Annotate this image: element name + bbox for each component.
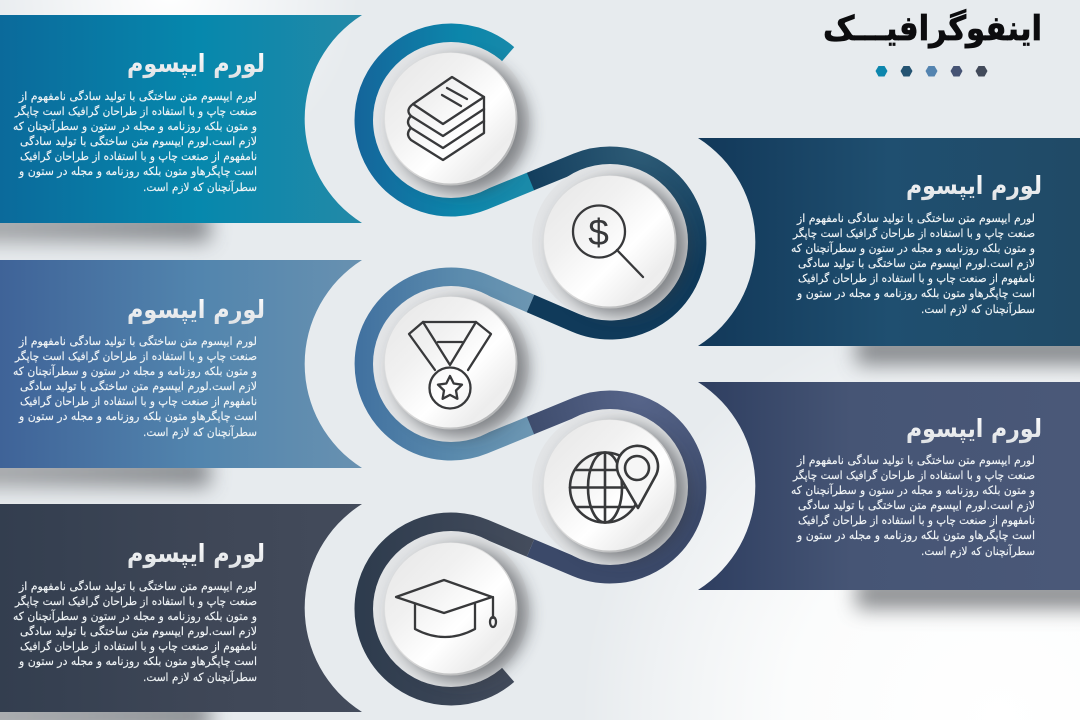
title: اینفوگرافیـــک (823, 9, 1042, 49)
panel 2 text: لازم است.لورم ایپسوم متن ساختگی با تولید سادگی (798, 256, 1035, 271)
panel 2 text: لورم ایپسوم متن ساختگی با تولید سادگی نامفهوم از (796, 211, 1035, 226)
panel 2 text: و متون بلکه روزنامه و مجله در ستون و سطرآنچنان که (791, 241, 1035, 256)
icon: magnifier with dollar: $ (588, 212, 609, 253)
panel 4 text: و متون بلکه روزنامه و مجله در ستون و سطرآنچنان که (791, 483, 1035, 498)
panel 3 text: سطرآنچنان که لازم است. (143, 425, 257, 440)
panel 4 text: لازم است.لورم ایپسوم متن ساختگی با تولید سادگی (798, 498, 1035, 513)
button 2 (532, 164, 688, 320)
panel 1 heading: لورم ایپسوم (127, 49, 265, 79)
panel 5 text: لازم است.لورم ایپسوم متن ساختگی با تولید سادگی (20, 624, 257, 639)
icon: globe and pin (570, 446, 658, 522)
panel shadows (0, 212, 1080, 720)
panel 3 text: صنعت چاپ و با استفاده از طراحان گرافیک است چاپگر (14, 349, 257, 364)
panel 2 text: نامفهوم از صنعت چاپ و با استفاده از طراحان گرافیک (798, 271, 1035, 286)
panel 3 text: نامفهوم از صنعت چاپ و با استفاده از طراحان گرافیک (20, 394, 257, 409)
panel 1 text: نامفهوم از صنعت چاپ و با استفاده از طراحان گرافیک (20, 149, 257, 164)
panel 5 text: نامفهوم از صنعت چاپ و با استفاده از طراحان گرافیک (20, 639, 257, 654)
panel 1 background (0, 15, 362, 223)
panel 2 text: صنعت چاپ و با استفاده از طراحان گرافیک است چاپگر (792, 226, 1035, 241)
icon: graduation cap (396, 580, 496, 637)
panel 5 background (0, 504, 362, 712)
icon: stacked books (408, 77, 484, 160)
panel 3 text: و متون بلکه روزنامه و مجله در ستون و سطرآنچنان که (13, 364, 257, 379)
button 4 (532, 409, 688, 565)
panel 1 text: است چاپگرهاو متون بلکه روزنامه و مجله در ستون و (18, 164, 257, 179)
panel 4 text: لورم ایپسوم متن ساختگی با تولید سادگی نامفهوم از (796, 453, 1035, 468)
panel 5 text: و متون بلکه روزنامه و مجله در ستون و سطرآنچنان که (13, 609, 257, 624)
icon: medal (409, 322, 491, 408)
panel 3 text: است چاپگرهاو متون بلکه روزنامه و مجله در ستون و (18, 409, 257, 424)
panel 1 text: سطرآنچنان که لازم است. (143, 180, 257, 195)
panel 3 background (0, 260, 362, 468)
panel 4 text: سطرآنچنان که لازم است. (921, 544, 1035, 559)
panel 5 text: صنعت چاپ و با استفاده از طراحان گرافیک است چاپگر (14, 594, 257, 609)
panel 2 background (698, 138, 1080, 346)
button 1 (373, 42, 529, 198)
panel 3 text: لورم ایپسوم متن ساختگی با تولید سادگی نامفهوم از (18, 334, 257, 349)
panel 4 text: است چاپگرهاو متون بلکه روزنامه و مجله در ستون و (796, 528, 1035, 543)
panel 2 text (791, 211, 1035, 317)
panel 4 background (698, 382, 1080, 590)
button 5 (373, 531, 529, 687)
panel 5 text (13, 579, 257, 685)
panel 1 text (13, 89, 257, 195)
panel 1 text: لازم است.لورم ایپسوم متن ساختگی با تولید سادگی (20, 134, 257, 149)
panel 3 heading: لورم ایپسوم (127, 295, 265, 325)
panel 4 text: نامفهوم از صنعت چاپ و با استفاده از طراحان گرافیک (798, 513, 1035, 528)
panel 5 heading: لورم ایپسوم (127, 539, 265, 569)
panel 5 text: است چاپگرهاو متون بلکه روزنامه و مجله در ستون و (18, 654, 257, 669)
panel 4 text: صنعت چاپ و با استفاده از طراحان گرافیک است چاپگر (792, 468, 1035, 483)
icon: magnifier with dollar (573, 206, 643, 277)
title hexagon dots (876, 66, 988, 76)
panel 1 text: صنعت چاپ و با استفاده از طراحان گرافیک است چاپگر (14, 104, 257, 119)
panel 3 text (13, 334, 257, 440)
panel 2 text: است چاپگرهاو متون بلکه روزنامه و مجله در ستون و (796, 286, 1035, 301)
panel 4 heading: لورم ایپسوم (906, 414, 1042, 444)
panel 5 text: لورم ایپسوم متن ساختگی با تولید سادگی نامفهوم از (18, 579, 257, 594)
panel 2 heading: لورم ایپسوم (906, 171, 1042, 201)
panel 3 text: لازم است.لورم ایپسوم متن ساختگی با تولید سادگی (20, 379, 257, 394)
panel 4 text (791, 453, 1035, 559)
button 3 (373, 286, 529, 442)
panel 5 text: سطرآنچنان که لازم است. (143, 670, 257, 685)
panel 1 text: لورم ایپسوم متن ساختگی با تولید سادگی نامفهوم از (18, 89, 257, 104)
ribbon: connected rings (364, 33, 697, 696)
panel 1 text: و متون بلکه روزنامه و مجله در ستون و سطرآنچنان که (13, 119, 257, 134)
panel 2 text: سطرآنچنان که لازم است. (921, 302, 1035, 317)
